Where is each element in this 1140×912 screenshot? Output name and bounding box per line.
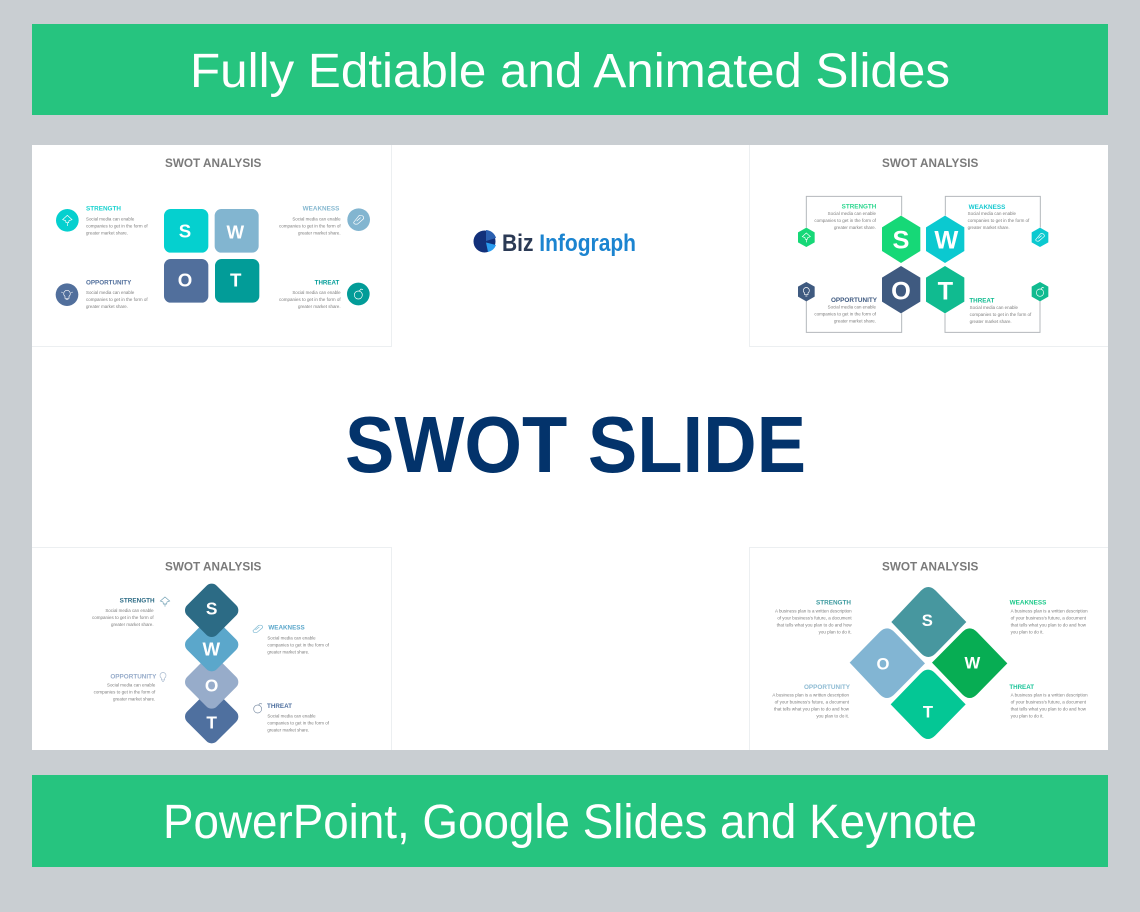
threat text: Social media can enable — [267, 714, 316, 719]
threat text: of your business's future, a document — [1011, 699, 1087, 704]
strength text: STRENGTH — [842, 203, 877, 210]
panel heading: SWOT ANALYSIS — [882, 559, 978, 573]
panel: large diamond SWOT — [772, 559, 1088, 739]
threat text: greater market share. — [298, 304, 341, 309]
opportunity small hexagon icon — [798, 282, 815, 301]
T diamond: T — [206, 713, 217, 733]
S segment: S — [922, 611, 933, 630]
logo pie icon — [474, 230, 496, 252]
strength small hexagon icon — [798, 228, 815, 247]
W hexagon: W — [934, 226, 958, 254]
weakness text: WEAKNESS — [303, 206, 339, 213]
W diamond — [182, 615, 241, 674]
O square — [164, 259, 208, 303]
O segment — [850, 628, 925, 698]
weakness text: Social media can enable — [267, 635, 316, 640]
opportunity text: Social media can enable — [86, 290, 135, 295]
threat text: companies to get in the form of — [267, 721, 330, 726]
weakness icon — [253, 625, 263, 633]
S diamond — [182, 581, 241, 640]
T segment: T — [923, 703, 933, 722]
T square — [215, 259, 259, 303]
opportunity text: A business plan is a written description — [772, 692, 850, 697]
weakness text — [968, 204, 1030, 230]
threat text — [969, 297, 1032, 324]
weakness icon — [347, 208, 370, 231]
threat text: Social media can enable — [970, 305, 1019, 310]
weakness small hexagon icon — [1032, 228, 1048, 247]
opportunity text: that tells what you plan to do and how — [774, 706, 850, 711]
weakness text: WEAKNESS — [268, 625, 305, 632]
strength text: Social media can enable — [828, 211, 877, 216]
O segment: O — [877, 655, 890, 674]
opportunity text — [772, 684, 851, 718]
weakness text: greater market share. — [968, 225, 1010, 230]
strength text: companies to get in the form of — [814, 218, 877, 223]
opportunity icon — [56, 283, 78, 306]
opportunity text — [94, 673, 157, 701]
opportunity text: OPPORTUNITY — [804, 684, 851, 691]
main title: SWOT SLIDE — [345, 400, 806, 489]
O diamond: O — [205, 676, 218, 696]
S square — [164, 209, 208, 253]
W segment: W — [964, 654, 980, 673]
opportunity text: OPPORTUNITY — [831, 297, 878, 304]
bottom banner heading: PowerPoint, Google Slides and Keynote — [163, 796, 977, 849]
W square — [215, 209, 259, 253]
threat text: A business plan is a written description — [1011, 692, 1088, 697]
opportunity icon — [160, 673, 166, 681]
strength text: companies to get in the form of — [86, 223, 148, 228]
opportunity text: Social media can enable — [828, 304, 877, 309]
logo wordmark: Biz Infograph — [502, 230, 636, 257]
threat icon — [254, 703, 262, 713]
strength text — [775, 600, 853, 635]
opportunity text — [814, 297, 878, 323]
strength text: that tells what you plan to do and how — [777, 623, 853, 628]
threat text: THREAT — [267, 703, 292, 710]
threat text — [279, 279, 341, 309]
W hexagon — [926, 216, 964, 263]
threat text: greater market share. — [970, 319, 1012, 324]
opportunity text: of your business's future, a document — [775, 699, 850, 704]
weakness text: of your business's future, a document — [1011, 616, 1087, 621]
O hexagon — [882, 266, 920, 313]
weakness text: WEAKNESS — [1010, 600, 1046, 607]
strength text: A business plan is a written description — [775, 609, 852, 614]
opportunity text: greater market share. — [86, 304, 128, 309]
strength text: Social media can enable — [105, 608, 154, 613]
weakness text — [279, 206, 341, 235]
strength text: STRENGTH — [86, 206, 121, 213]
bottom banner — [32, 775, 1108, 867]
weakness text: Social media can enable — [292, 216, 341, 221]
opportunity text: OPPORTUNITY — [86, 279, 132, 286]
panel: hexagons SWOT — [798, 156, 1048, 332]
opportunity text: you plan to do it. — [816, 713, 849, 718]
bracket lines — [806, 196, 1040, 332]
O square: O — [178, 269, 192, 290]
panel heading: SWOT ANALYSIS — [165, 559, 261, 573]
opportunity text: OPPORTUNITY — [110, 673, 157, 680]
weakness text: you plan to do it. — [1011, 630, 1044, 635]
logo: Biz Infograph — [474, 230, 636, 257]
weakness text: that tells what you plan to do and how — [1011, 623, 1087, 628]
opportunity text: greater market share. — [113, 696, 155, 701]
strength text: STRENGTH — [120, 597, 155, 604]
threat text: companies to get in the form of — [279, 297, 341, 302]
strength icon — [160, 597, 170, 607]
opportunity text: greater market share. — [834, 318, 876, 323]
threat text — [1009, 684, 1088, 718]
top banner heading: Fully Edtiable and Animated Slides — [190, 45, 950, 98]
W diamond: W — [203, 638, 221, 659]
weakness text — [1010, 600, 1088, 635]
opportunity text: companies to get in the form of — [814, 311, 877, 316]
S square: S — [179, 220, 191, 241]
S segment — [891, 587, 966, 657]
strength text: of your business's future, a document — [777, 616, 852, 621]
weakness text: companies to get in the form of — [267, 642, 330, 647]
O diamond — [182, 652, 241, 712]
strength icon — [56, 209, 79, 232]
panel: rounded squares SWOT — [56, 156, 370, 309]
threat icon — [347, 283, 370, 305]
weakness text: companies to get in the form of — [279, 223, 341, 228]
threat text: companies to get in the form of — [970, 312, 1032, 317]
opportunity text — [86, 279, 148, 309]
strength text: greater market share. — [834, 225, 876, 230]
threat text: that tells what you plan to do and how — [1011, 706, 1087, 711]
threat text: you plan to do it. — [1011, 713, 1044, 718]
threat text: THREAT — [315, 279, 339, 286]
T square: T — [230, 269, 242, 290]
weakness text: greater market share. — [298, 230, 341, 235]
strength text — [86, 206, 148, 235]
S hexagon: S — [893, 226, 909, 254]
threat text: THREAT — [1009, 684, 1034, 691]
W segment — [932, 628, 1007, 698]
threat text — [267, 703, 330, 733]
O hexagon: O — [891, 277, 911, 305]
white content area — [32, 145, 1108, 750]
strength text — [814, 203, 877, 230]
strength text: you plan to do it. — [819, 630, 852, 635]
strength text — [92, 597, 155, 627]
opportunity text: Social media can enable — [107, 682, 156, 687]
S hexagon — [882, 216, 920, 263]
top banner — [32, 24, 1108, 115]
strength text: STRENGTH — [816, 600, 851, 607]
strength text: greater market share. — [111, 622, 154, 627]
panel heading: SWOT ANALYSIS — [882, 156, 978, 170]
S diamond: S — [206, 599, 217, 619]
strength text: companies to get in the form of — [92, 615, 154, 620]
weakness text: Social media can enable — [968, 211, 1017, 216]
opportunity text: companies to get in the form of — [86, 297, 148, 302]
weakness text: WEAKNESS — [969, 204, 1005, 211]
threat small hexagon icon — [1032, 282, 1048, 301]
threat text: Social media can enable — [292, 290, 341, 295]
weakness text — [267, 625, 330, 654]
weakness text: greater market share. — [267, 649, 309, 654]
T hexagon: T — [938, 277, 954, 305]
T segment — [891, 670, 966, 739]
opportunity text: companies to get in the form of — [94, 689, 156, 694]
weakness text: companies to get in the form of — [968, 218, 1030, 223]
T hexagon — [926, 266, 964, 313]
strength text: Social media can enable — [86, 216, 135, 221]
panel: stacked diamonds SWOT — [92, 559, 330, 746]
T diamond — [182, 687, 241, 746]
W square: W — [227, 222, 245, 243]
threat text: greater market share. — [267, 728, 309, 733]
threat text: THREAT — [969, 297, 994, 304]
strength text: greater market share. — [86, 230, 128, 235]
panel heading: SWOT ANALYSIS — [165, 156, 261, 170]
weakness text: A business plan is a written description — [1011, 609, 1088, 614]
